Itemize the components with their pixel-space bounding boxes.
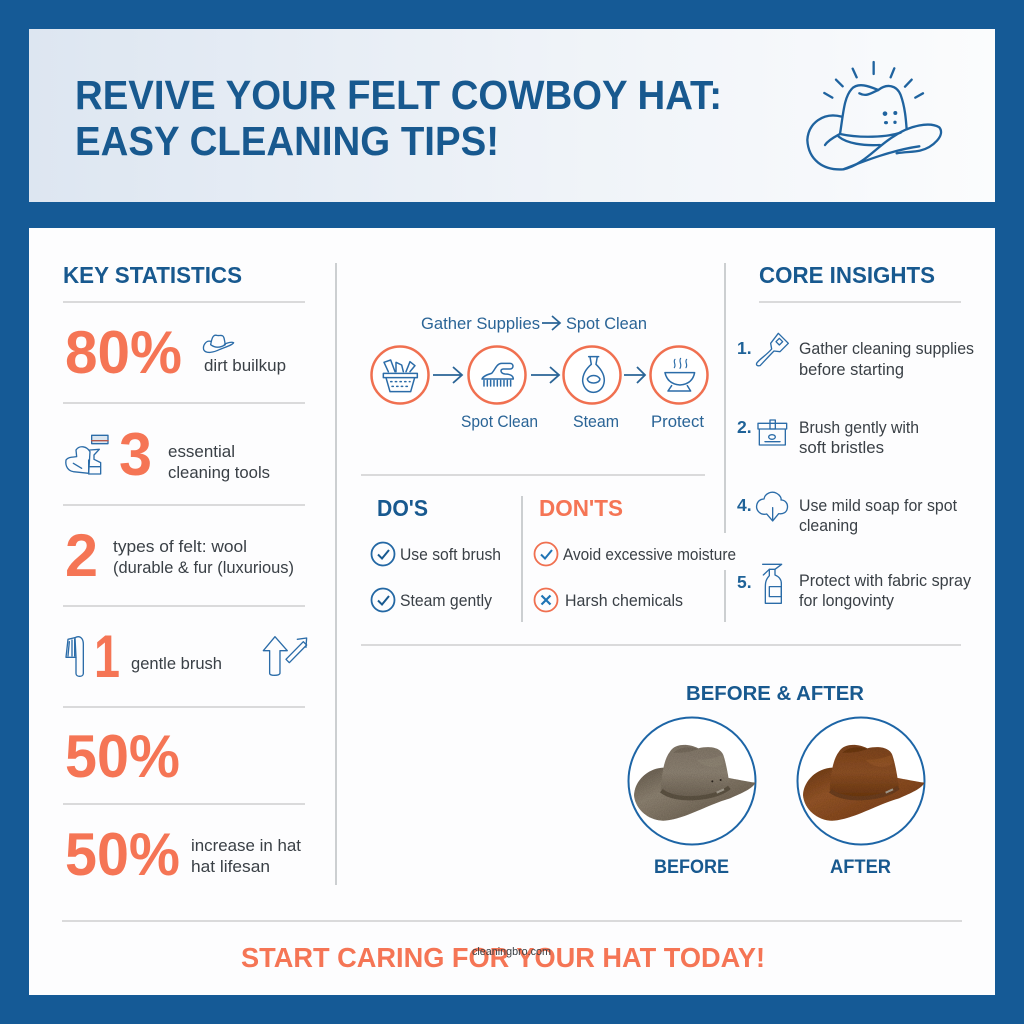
stat: 3 essential cleaning tools — [66, 421, 270, 488]
insight 1 — [737, 333, 974, 379]
item: avoid excessive moisture — [534, 542, 736, 566]
item: avoid excessive moisture: Avoid excessive moisture — [563, 546, 736, 564]
label: after: AFTER — [830, 857, 891, 878]
insight 5 — [737, 564, 972, 610]
stat: 50% lifespan — [65, 821, 301, 888]
stat: 1 gentle brush: 1 — [94, 623, 120, 690]
heading: don'ts: DON'TS — [539, 495, 623, 521]
insight 1: Gather cleaning supplies — [799, 340, 974, 358]
step: steam — [564, 346, 620, 404]
panel: core insights — [737, 262, 974, 610]
title — [75, 72, 722, 164]
step labels: Steam — [573, 413, 619, 431]
icon: upward arrows — [263, 637, 307, 675]
label: before: BEFORE — [654, 857, 729, 878]
stat: 50%: 50% — [65, 723, 180, 790]
stat: 80% dirt buildup — [65, 319, 286, 386]
heading: key statistics: KEY STATISTICS — [63, 262, 242, 288]
flow heading — [421, 315, 647, 333]
heading: before & after: BEFORE & AFTER — [686, 683, 865, 705]
stat: 50% lifespan: 50% — [65, 821, 180, 888]
insight 5: 5. — [737, 572, 752, 592]
insight 2: soft bristles — [799, 439, 884, 457]
after hat photo — [798, 718, 924, 844]
main panel — [29, 228, 995, 995]
stat: 3 essential cleaning tools: essential — [168, 443, 235, 461]
flow heading: Spot Clean — [566, 315, 647, 333]
insight 2: 2. — [737, 417, 752, 437]
flow heading: Gather Supplies — [421, 315, 540, 333]
stat: 50% lifespan: increase in hat — [191, 837, 301, 855]
arrow — [624, 367, 645, 383]
arrow — [531, 367, 559, 383]
header panel — [29, 29, 995, 202]
watermark: cleaningbro.com — [472, 946, 551, 958]
insight 2: Brush gently with — [799, 419, 919, 437]
step labels: Spot Clean — [461, 413, 538, 431]
stat: 1 gentle brush: gentle brush — [131, 655, 222, 673]
step: protect — [650, 346, 708, 404]
stat: 3 essential cleaning tools: cleaning tools — [168, 464, 270, 482]
item: harsh chemicals — [534, 588, 683, 612]
insight 4: Use mild soap for spot — [799, 497, 957, 515]
item: use soft brush: Use soft brush — [400, 546, 501, 564]
insight 1: before starting — [799, 361, 904, 379]
stat: 3 essential cleaning tools: 3 — [119, 421, 152, 488]
panel: key statistics — [63, 262, 307, 888]
icon: small hat — [203, 335, 234, 352]
heading: core insights: CORE INSIGHTS — [759, 262, 935, 288]
stat: 2 types of felt — [65, 522, 294, 589]
title: EASY CLEANING TIPS! — [75, 118, 499, 164]
panel: before and after — [628, 683, 924, 878]
heading: do's: DO'S — [377, 495, 428, 521]
icon: brush — [66, 637, 83, 676]
step labels — [461, 413, 704, 431]
insight 5: for longovinty — [799, 592, 895, 610]
stat: 80% dirt buildup: dirt builkup — [204, 357, 286, 375]
stat: 80% dirt buildup: 80% — [65, 319, 182, 386]
title: REVIVE YOUR FELT COWBOY HAT: — [75, 72, 722, 118]
panel: do's — [372, 495, 501, 612]
stat: 2 types of felt: 2 — [65, 522, 98, 589]
icon: cowboy hat with rays — [807, 62, 941, 169]
item: harsh chemicals: Harsh chemicals — [565, 592, 683, 610]
step: gather supplies — [372, 346, 428, 404]
insight 4: 4. — [737, 495, 752, 515]
call to action: START CARING FOR YOUR HAT TODAY! — [241, 942, 765, 973]
step labels: Protect — [651, 413, 704, 431]
stat: 1 gentle brush — [66, 623, 307, 690]
item: steam gently: Steam gently — [400, 592, 493, 610]
stat: 2 types of felt: (durable & fur (luxurious) — [113, 559, 294, 577]
arrow — [433, 367, 462, 383]
insight 2 — [737, 417, 919, 457]
insight 1: 1. — [737, 338, 752, 358]
insight 5: Protect with fabric spray — [799, 572, 972, 590]
panel: process flow — [372, 315, 708, 431]
before hat photo — [628, 718, 756, 844]
insight 4: cleaning — [799, 517, 858, 535]
stat: 2 types of felt: types of felt: wool — [113, 538, 247, 556]
step: spot clean — [468, 346, 526, 404]
icon: cleaning supplies — [66, 435, 108, 474]
panel: don'ts — [534, 495, 736, 612]
stat: 50% lifespan: hat lifesan — [191, 858, 270, 876]
insight 4 — [737, 492, 957, 535]
